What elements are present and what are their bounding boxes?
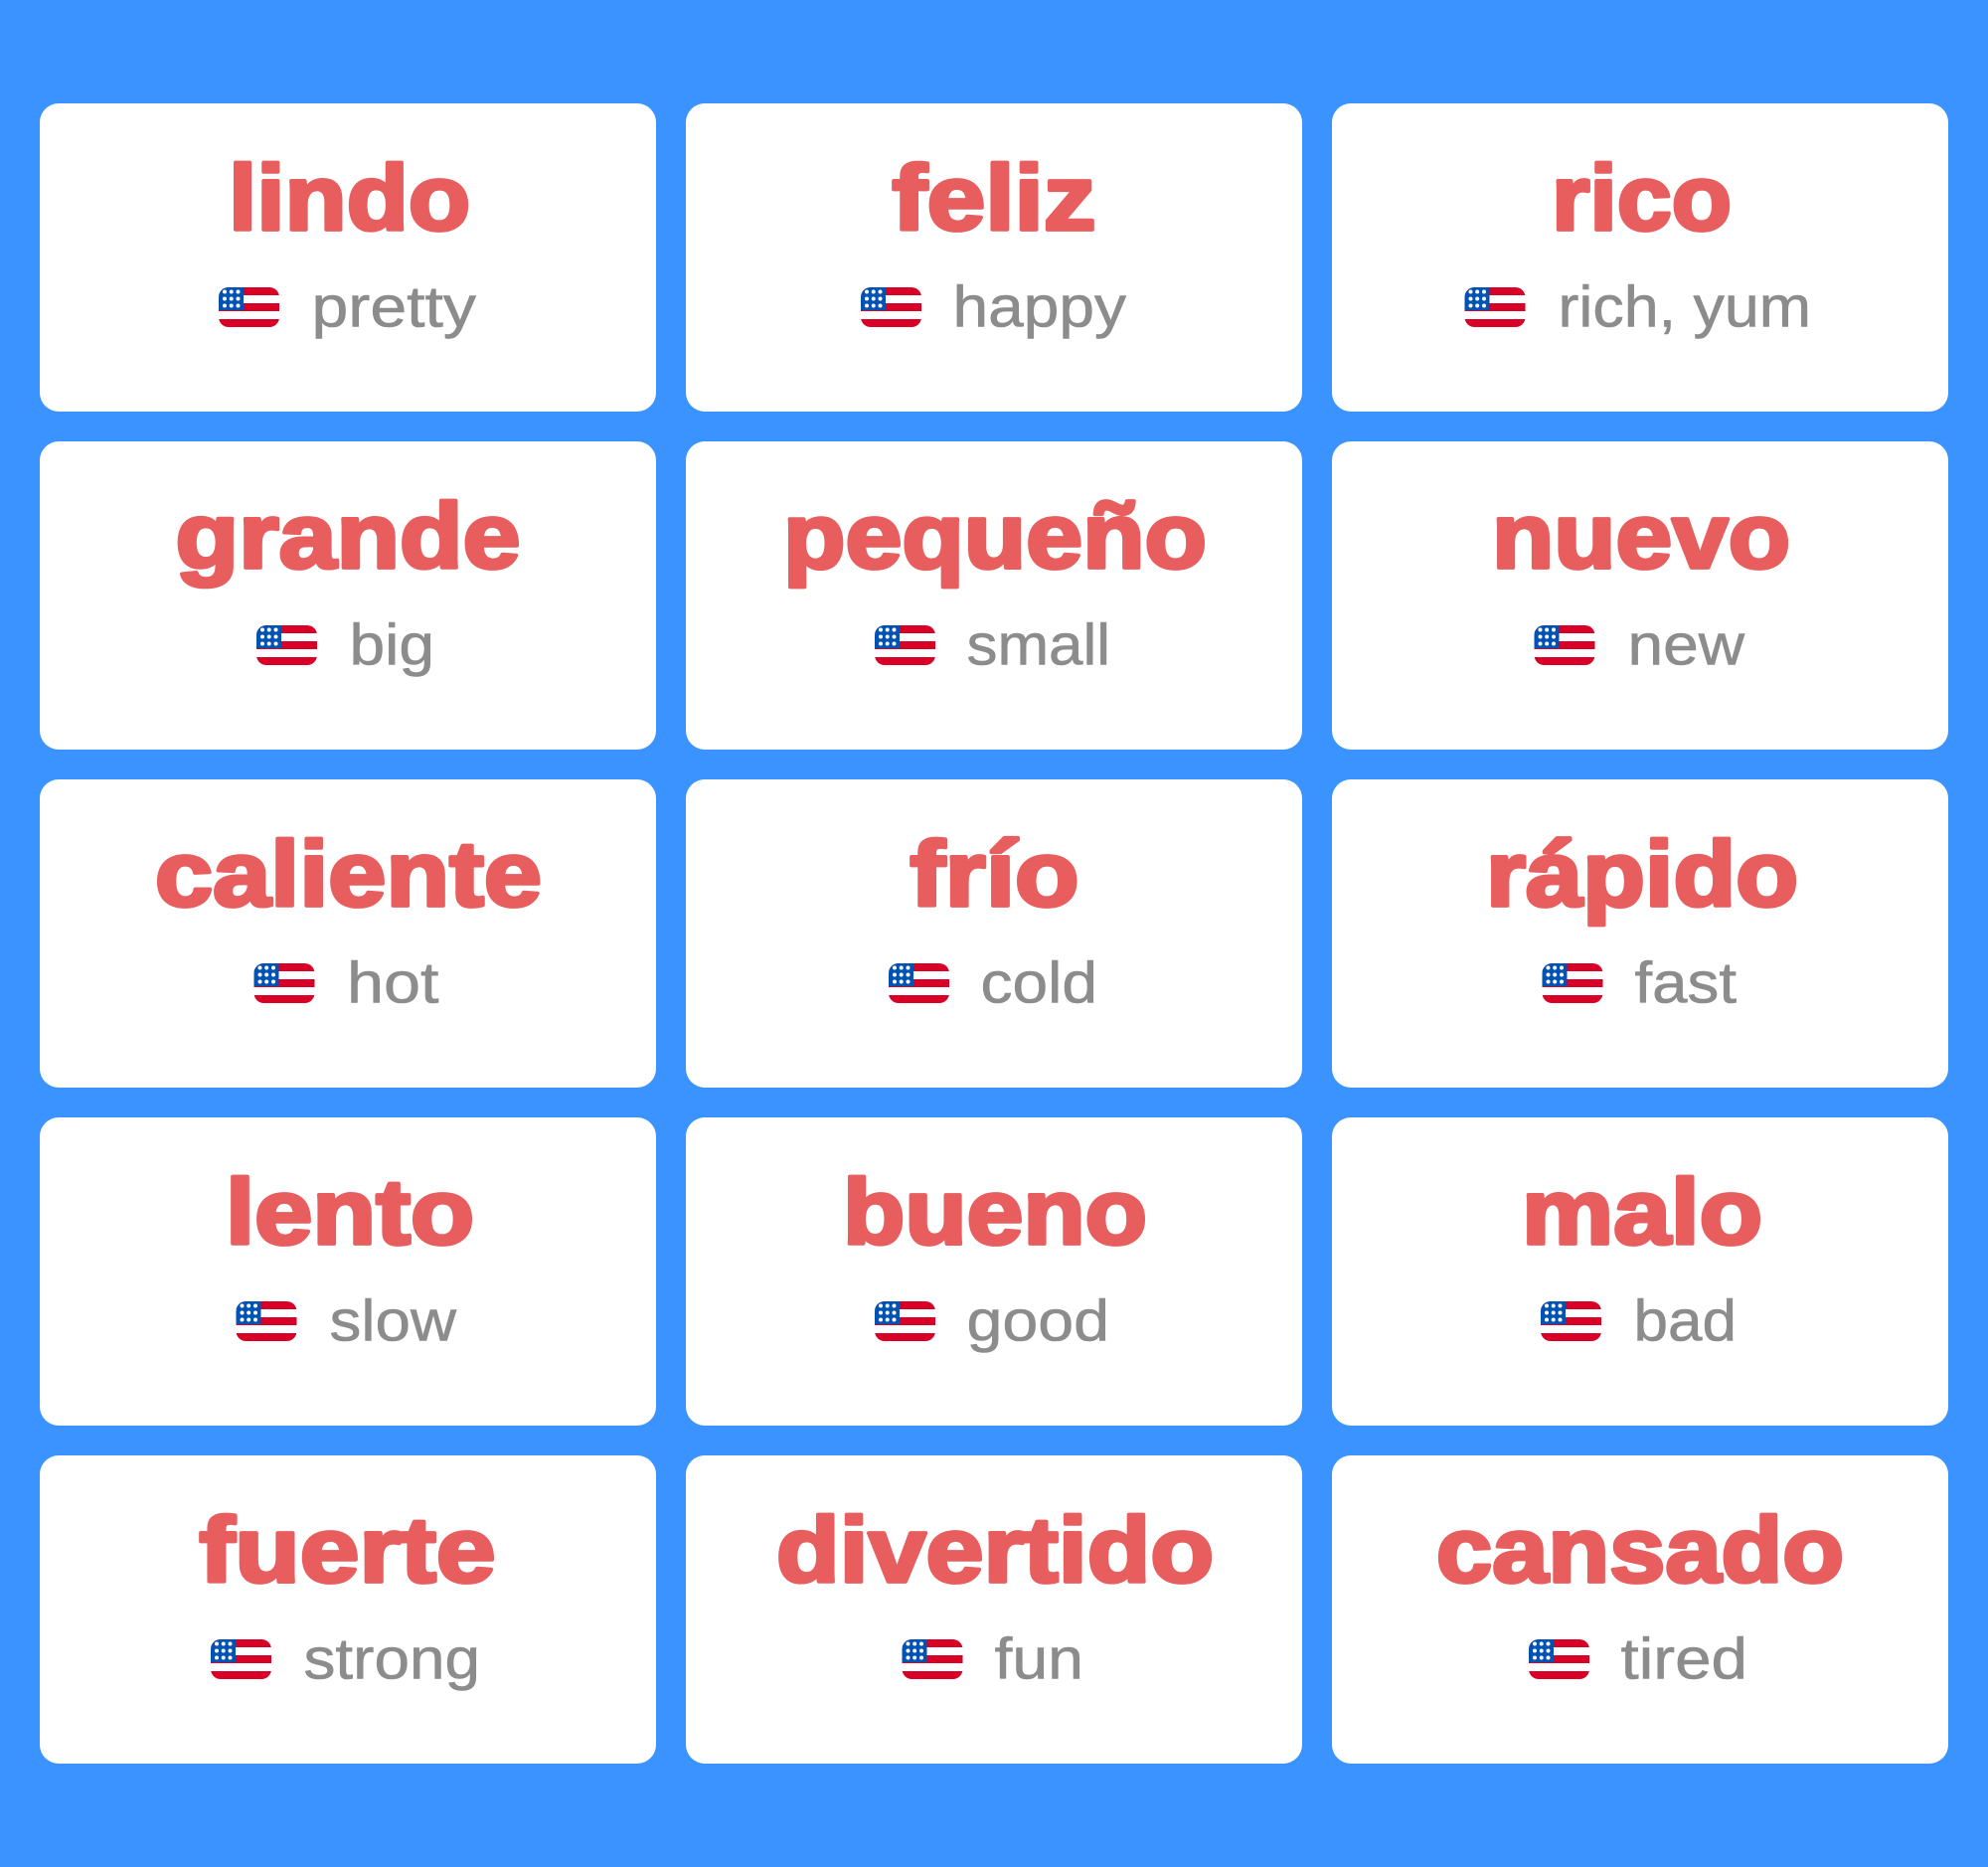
card: lento <box>40 1117 656 1426</box>
icon: US flag <box>211 1639 271 1679</box>
translation: tired: tired <box>1620 1626 1747 1692</box>
word: grande: grande <box>175 484 521 588</box>
translation: hot: hot <box>347 950 439 1016</box>
icon: US flag <box>861 287 921 327</box>
icon: US flag <box>903 1639 962 1679</box>
translation: happy: happy <box>952 274 1126 340</box>
translation: big: big <box>350 612 434 678</box>
card: feliz <box>686 103 1302 412</box>
translation: small: small <box>966 612 1110 678</box>
card: nuevo <box>1332 441 1948 750</box>
translation: good: good <box>966 1288 1109 1354</box>
card: rápido <box>1332 779 1948 1088</box>
card: frío <box>686 779 1302 1088</box>
card: bueno <box>686 1117 1302 1426</box>
icon: US flag <box>256 625 317 665</box>
card: divertido <box>686 1455 1302 1764</box>
word: fuerte: fuerte <box>199 1498 495 1602</box>
word: nuevo: nuevo <box>1492 484 1790 588</box>
card: lindo <box>40 103 656 412</box>
icon: US flag <box>1541 1301 1601 1341</box>
word: caliente: caliente <box>155 822 542 926</box>
word: bueno: bueno <box>843 1160 1147 1264</box>
icon: US flag <box>875 1301 935 1341</box>
translation: slow: slow <box>330 1288 457 1354</box>
card: rico <box>1332 103 1948 412</box>
card: cansado <box>1332 1455 1948 1764</box>
translation: bad: bad <box>1634 1288 1737 1354</box>
card: grande <box>40 441 656 750</box>
word: pequeño: pequeño <box>783 484 1207 588</box>
translation: rich, yum: rich, yum <box>1559 274 1811 340</box>
word: cansado: cansado <box>1436 1498 1844 1602</box>
translation: new: new <box>1628 612 1745 678</box>
word: malo: malo <box>1522 1160 1762 1264</box>
icon: US flag <box>237 1301 296 1341</box>
icon: US flag <box>1529 1639 1589 1679</box>
word: frío: frío <box>911 822 1079 926</box>
word: rico: rico <box>1552 146 1732 250</box>
card: caliente <box>40 779 656 1088</box>
icon: US flag <box>254 963 314 1003</box>
translation: cold: cold <box>980 950 1097 1016</box>
word: rápido: rápido <box>1486 822 1798 926</box>
translation: strong: strong <box>304 1626 480 1692</box>
icon: US flag <box>219 287 279 327</box>
icon: US flag <box>1465 287 1525 327</box>
icon: US flag <box>875 625 935 665</box>
card: malo <box>1332 1117 1948 1426</box>
word: lento: lento <box>226 1160 474 1264</box>
translation: fast: fast <box>1634 950 1737 1016</box>
word: divertido: divertido <box>776 1498 1214 1602</box>
card: fuerte <box>40 1455 656 1764</box>
icon: US flag <box>889 963 949 1003</box>
word: lindo: lindo <box>229 146 470 250</box>
word: feliz: feliz <box>893 146 1095 250</box>
icon: US flag <box>1535 625 1594 665</box>
translation: pretty: pretty <box>312 274 476 340</box>
icon: US flag <box>1543 963 1602 1003</box>
translation: fun: fun <box>994 1626 1083 1692</box>
card: pequeño <box>686 441 1302 750</box>
